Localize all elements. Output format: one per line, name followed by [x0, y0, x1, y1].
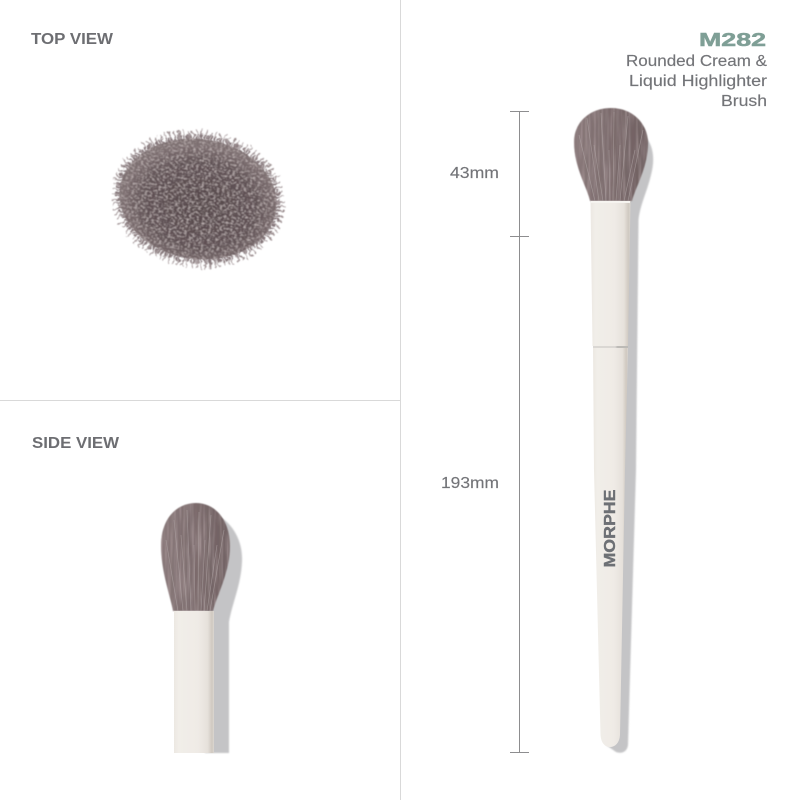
handle: [593, 348, 628, 747]
label: head length: 43mm: [450, 165, 499, 182]
ferrule: [590, 201, 630, 346]
bristles: side brush: [161, 503, 230, 611]
product name: [626, 53, 768, 110]
product name: Liquid Highlighter: [629, 73, 768, 90]
dimension scale: [441, 111, 529, 753]
product name: Brush: [721, 93, 767, 110]
bristles: full brush: [574, 108, 648, 201]
panel dividers: [0, 0, 401, 800]
shadow: side brush: [205, 518, 242, 753]
brush: side view: [161, 503, 242, 753]
dimension lines: [510, 111, 529, 753]
brand logo: MORPHE: [602, 490, 619, 568]
brush head: top view: [111, 129, 285, 269]
heading: top view: TOP VIEW: [31, 31, 114, 48]
dense centre: [111, 129, 285, 269]
product code: M282: [699, 30, 766, 50]
outer spikes: [112, 129, 284, 269]
product title: [626, 30, 768, 110]
ferrule seam: [593, 346, 628, 348]
handle: side brush: [174, 611, 214, 753]
product name: Rounded Cream &: [626, 53, 767, 70]
label: total length: 193mm: [441, 475, 499, 492]
full brush: [574, 108, 653, 753]
shadow: full brush: [606, 135, 653, 753]
heading: side view: SIDE VIEW: [32, 435, 120, 452]
ferrule rim highlight: [591, 201, 630, 203]
